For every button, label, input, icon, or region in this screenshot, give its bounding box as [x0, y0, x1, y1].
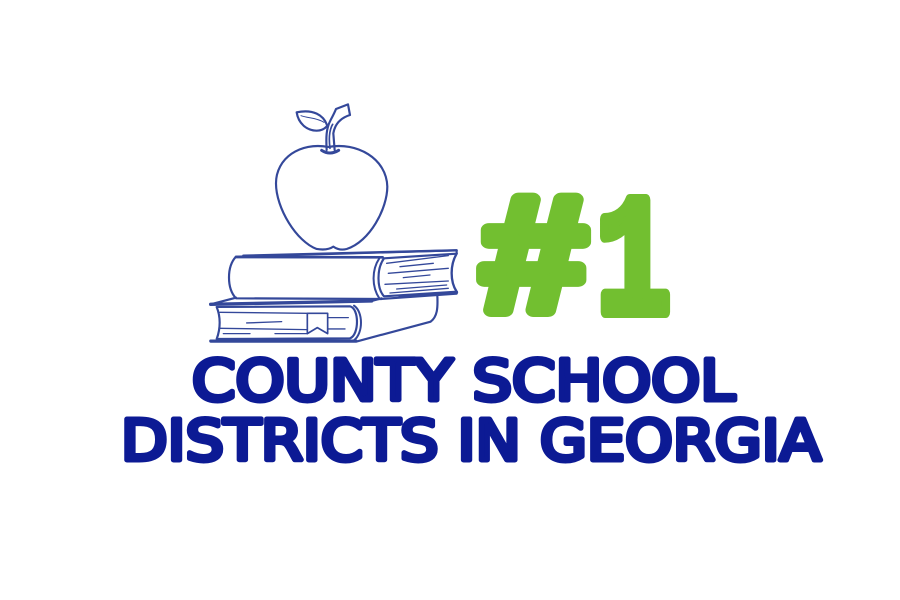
icon: apple on stacked books — [211, 104, 457, 342]
icon: bookmark — [307, 313, 328, 334]
title line 1: COUNTY SCHOOL — [192, 349, 735, 414]
icon: top book — [229, 250, 457, 299]
hash sign: # — [481, 164, 586, 345]
icon: bottom book — [211, 295, 438, 342]
title line 2: DISTRICTS IN GEORGIA — [121, 409, 821, 474]
icon: apple — [276, 104, 387, 250]
number one: 1 — [596, 171, 671, 364]
title: county school districts in Georgia — [121, 349, 821, 474]
heading: #1 — [481, 164, 671, 364]
